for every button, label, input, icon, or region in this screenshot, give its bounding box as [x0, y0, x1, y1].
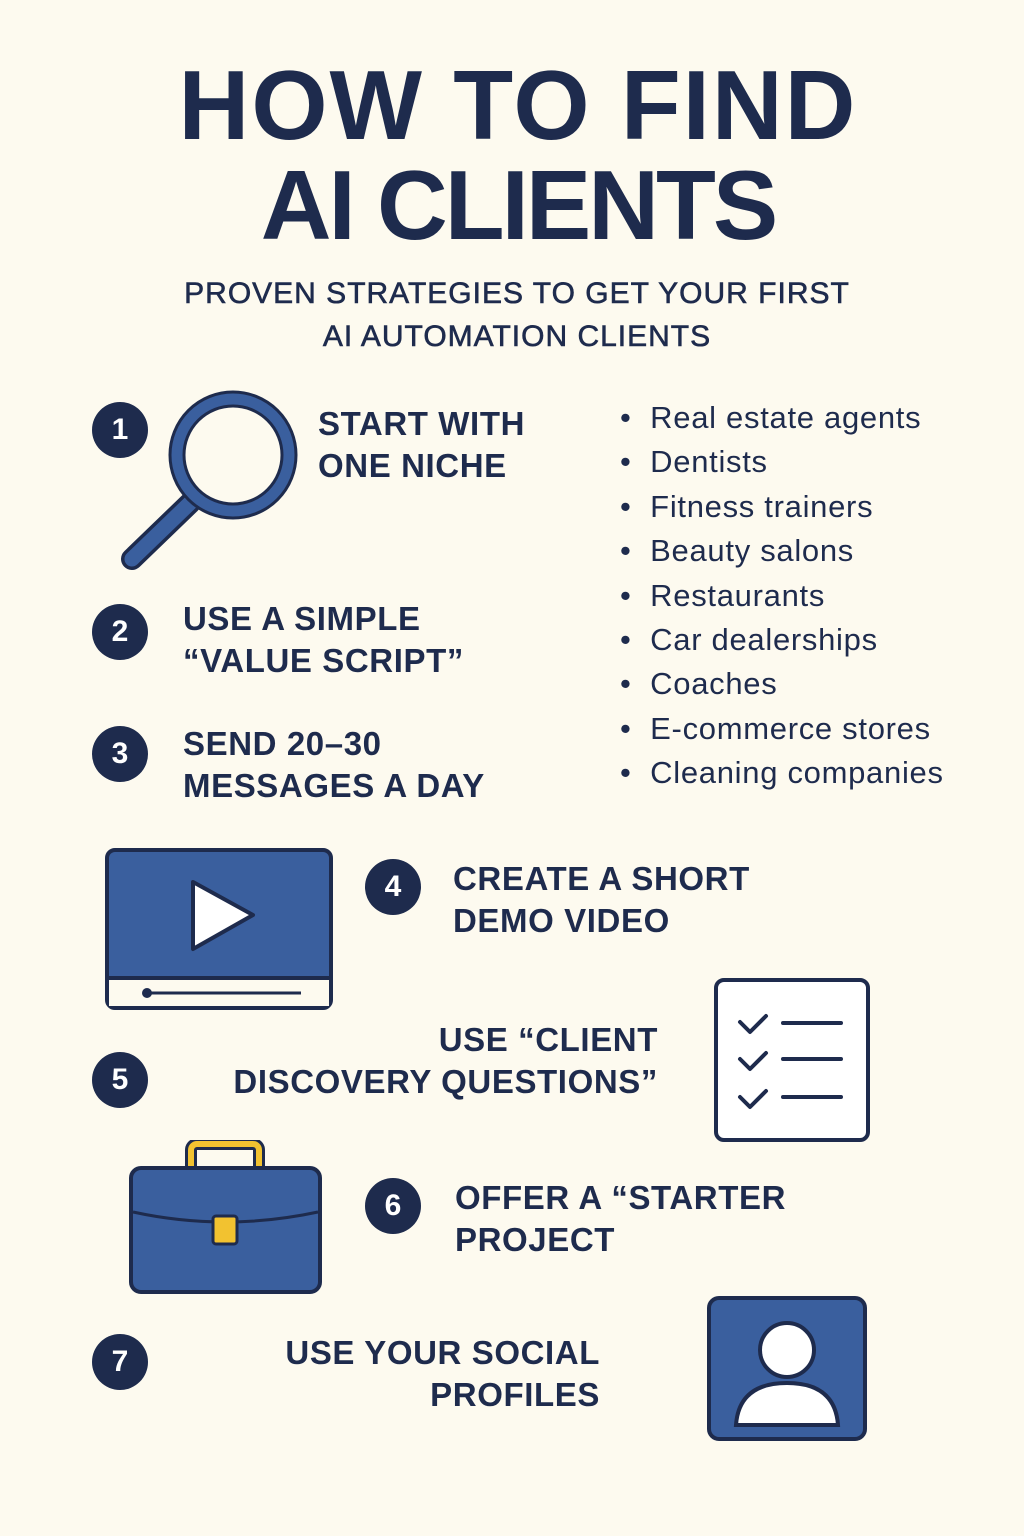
step 2 text: USE A SIMPLE — [183, 600, 421, 637]
niche list: • E-commerce stores — [620, 711, 931, 746]
step 7 number: 7 — [112, 1345, 128, 1378]
niche list: • Beauty salons — [620, 533, 854, 568]
step 6 number — [365, 1178, 421, 1234]
step 1 text: START WITH — [318, 405, 525, 442]
step 4 number: 4 — [385, 870, 401, 903]
step 2 number: 2 — [112, 615, 128, 648]
subtitle: PROVEN STRATEGIES TO GET YOUR FIRST — [184, 277, 850, 310]
icon: magnifier — [121, 390, 298, 570]
title: HOW TO FIND — [179, 50, 857, 160]
step 3 number: 3 — [112, 737, 128, 770]
step 5 text: DISCOVERY QUESTIONS” — [233, 1063, 658, 1100]
step 3 text: MESSAGES A DAY — [183, 767, 485, 804]
step 1 text: ONE NICHE — [318, 447, 507, 484]
step 1 number: 1 — [112, 413, 128, 446]
subtitle: AI AUTOMATION CLIENTS — [323, 320, 711, 353]
step 4 text — [453, 860, 750, 939]
step 5 number — [92, 1052, 148, 1108]
niche list: • Real estate agents — [620, 400, 921, 435]
niche list — [620, 400, 944, 790]
icon: checklist — [714, 978, 870, 1142]
niche list: • Coaches — [620, 666, 777, 701]
step 4 text: DEMO VIDEO — [453, 902, 670, 939]
title: AI CLIENTS — [261, 150, 775, 260]
subtitle — [184, 277, 850, 353]
niche list: • Car dealerships — [620, 622, 878, 657]
step 2 text — [183, 600, 464, 679]
step 4 number — [365, 859, 421, 915]
step 6 text: PROJECT — [455, 1221, 615, 1258]
niche list: • Restaurants — [620, 578, 825, 613]
step 5 number: 5 — [112, 1063, 128, 1096]
step 6 number: 6 — [385, 1189, 401, 1222]
step 5 text — [233, 1021, 658, 1100]
niche list: • Cleaning companies — [620, 755, 944, 790]
step 1 text — [318, 405, 525, 484]
niche list: • Fitness trainers — [620, 489, 873, 524]
title — [179, 50, 857, 260]
step 2 number — [92, 604, 148, 660]
step 2 text: “VALUE SCRIPT” — [183, 642, 464, 679]
icon: briefcase — [129, 1140, 322, 1294]
step 7 text: PROFILES — [430, 1376, 600, 1413]
step 7 text — [285, 1334, 600, 1413]
step 1 number — [92, 402, 148, 458]
step 4 text: CREATE A SHORT — [453, 860, 750, 897]
icon: profile — [707, 1296, 867, 1441]
step 6 text — [455, 1179, 786, 1258]
step 5 text: USE “CLIENT — [439, 1021, 658, 1058]
step 3 text: SEND 20–30 — [183, 725, 382, 762]
step 3 number — [92, 726, 148, 782]
icon: video — [105, 848, 333, 1010]
step 3 text — [183, 725, 485, 804]
niche list: • Dentists — [620, 444, 768, 479]
step 7 text: USE YOUR SOCIAL — [285, 1334, 600, 1371]
step 7 number — [92, 1334, 148, 1390]
step 6 text: OFFER A “STARTER — [455, 1179, 786, 1216]
